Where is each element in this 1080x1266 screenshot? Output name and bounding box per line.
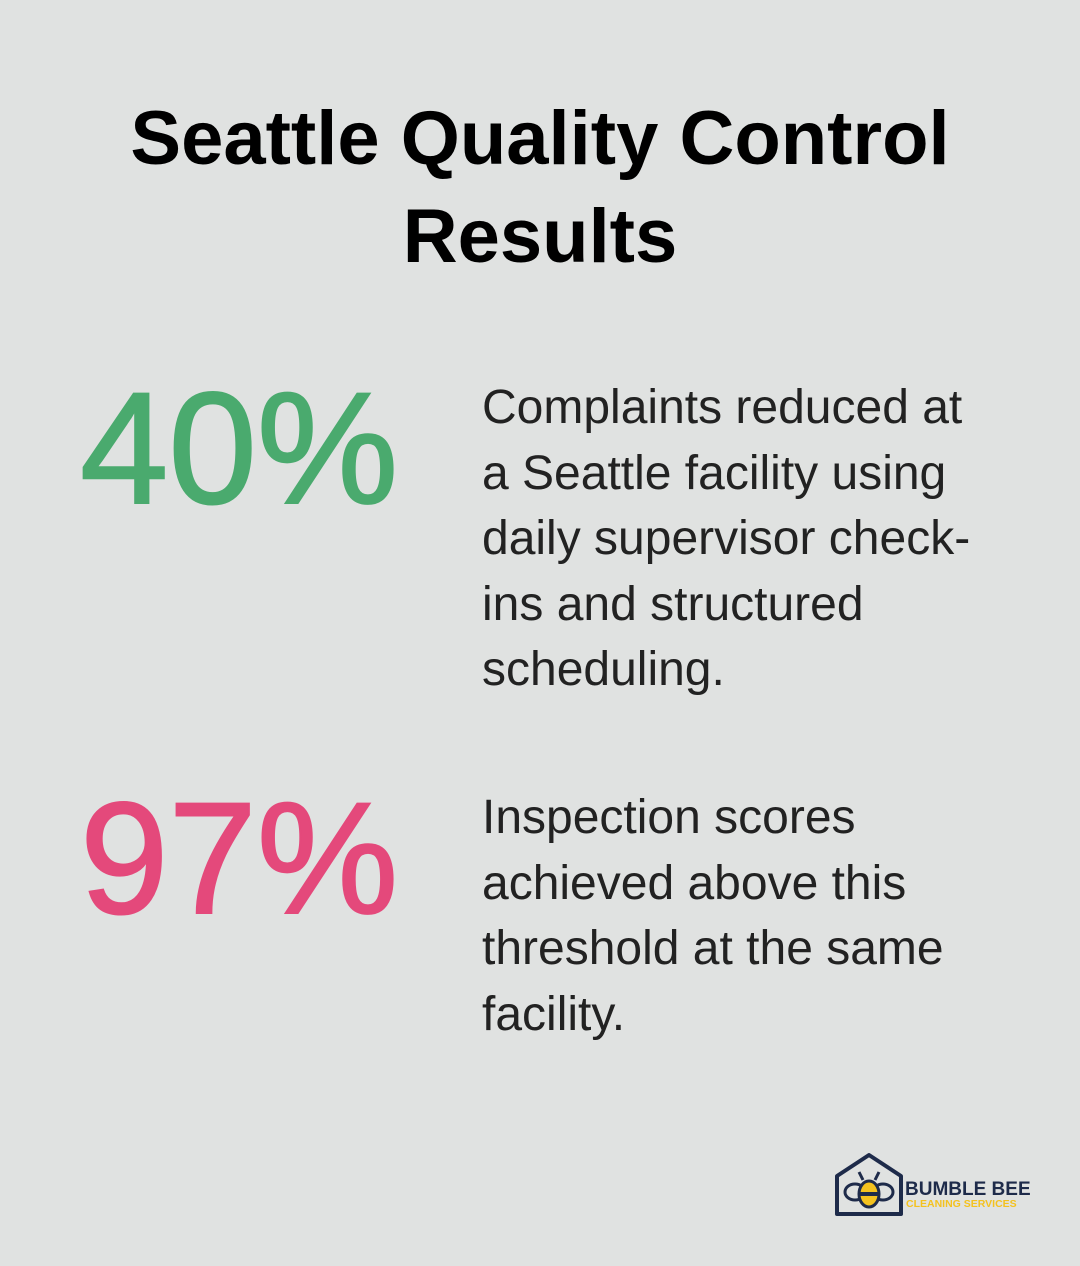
stat 1 description: scheduling. [482,643,725,696]
stat 2 description: threshold at the same [482,922,944,975]
stat 1 description: ins and structured [482,578,864,630]
title: Results [403,194,677,279]
title [130,96,950,279]
stat 1 number: 40% [80,359,398,537]
logo [835,1153,1031,1216]
stat 1 description [482,381,970,696]
stat 2 description: achieved above this [482,856,906,910]
title: Seattle Quality Control [130,96,950,181]
stat 2 description: Inspection scores [482,791,856,844]
logo: CLEANING SERVICES [906,1198,1017,1210]
stat 2 number: 97% [80,769,398,947]
icon: house with bee [837,1155,901,1214]
stat 2 description [482,791,944,1040]
stat 2 description: facility. [482,988,625,1040]
stat 1 description: a Seattle facility using [482,446,946,500]
stat 1 description: daily supervisor check- [482,512,970,565]
logo text: BUMBLE BEE [905,1179,1031,1200]
stat 1 description: Complaints reduced at [482,381,962,434]
